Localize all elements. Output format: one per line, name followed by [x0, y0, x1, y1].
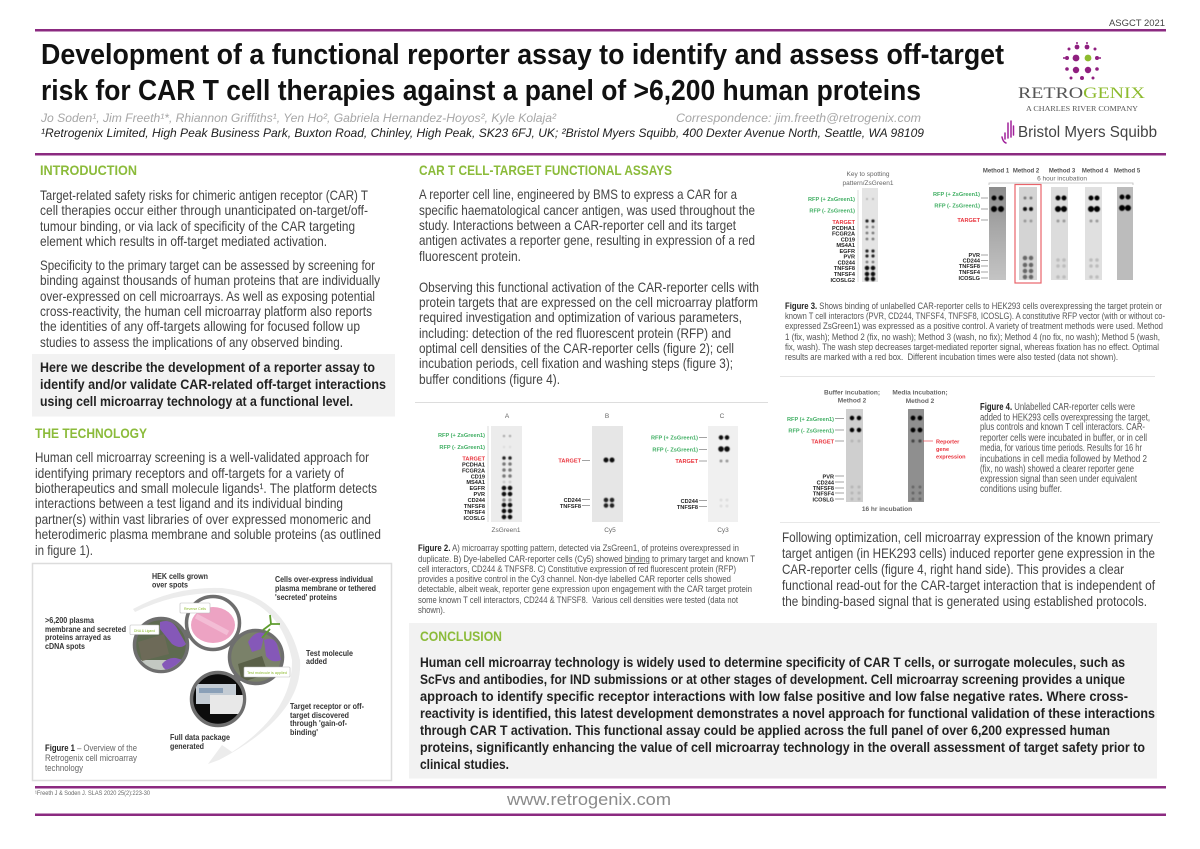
figure 3 caption: results are marked with a red box. Different incubation times were also tested (data not shown). — [785, 352, 1118, 363]
key to spotting pattern: MS4A1 — [836, 243, 855, 249]
annotation: data package: generated — [170, 742, 204, 751]
website: www.retrogenix.com — [506, 790, 671, 809]
labels: RFP (+ ZsGreen1) — [438, 433, 485, 439]
labels: RFP (+ ZsGreen1) — [651, 436, 698, 442]
annotation: target receptor: through 'gain-of- — [290, 719, 347, 728]
footer rule bottom — [35, 814, 1166, 816]
annotation: test molecule: added — [306, 657, 327, 666]
buffer strip labels: RFP (- ZsGreen1) — [788, 428, 834, 434]
annotation: HEK cells: over spots — [152, 580, 188, 590]
panel A strip: TNFSF8 — [464, 504, 485, 510]
figure 2 — [418, 413, 755, 616]
heading: THE TECHNOLOGY — [35, 425, 148, 441]
closing paragraph: CAR-reporter cells (figure 4, right hand side). This provides a clear — [782, 562, 1124, 577]
buffer strip labels: TARGET — [811, 440, 835, 446]
spots — [606, 458, 612, 462]
assay paragraph 2 — [419, 280, 759, 387]
incubation bracket: 6 hour incubation — [1037, 176, 1087, 182]
icon: antibody — [262, 615, 280, 638]
header rule bottom — [35, 153, 1166, 156]
panel: conclusion — [409, 623, 1157, 778]
figure 2 caption — [418, 543, 755, 616]
buffer strip labels: ICOSLG — [813, 498, 834, 504]
panel C strip: CD244 — [681, 499, 699, 505]
technology paragraph: interactions between a test ligand and its individual binding — [35, 496, 343, 511]
correspondence: Correspondence: jim.freeth@retrogenix.com — [676, 111, 921, 125]
labels: TARGET — [558, 458, 582, 464]
conclusion text: approach to identify specific receptor interactions with low false positive and low false negative rates. Where cross- — [420, 689, 1128, 704]
buffer strip labels — [787, 417, 844, 504]
figure 4 caption: plus controls and known T cell interactors. CAR- — [980, 422, 1145, 433]
assay paragraph 1: specific haematological cancer antigen, was used throughout the — [419, 203, 755, 218]
annotation: test molecule — [306, 649, 353, 666]
panel A strip: EGFR — [469, 486, 485, 492]
key to spotting pattern: FCGR2A — [832, 232, 855, 238]
intro paragraph 2: Specificity to the primary target can be assessed by screening for — [40, 258, 375, 273]
spots — [721, 435, 727, 440]
intro paragraph 2 — [40, 258, 380, 350]
key to spotting pattern: CD244 — [838, 260, 856, 266]
annotation: HEK cells: HEK cells grown — [152, 572, 208, 581]
annotation: over-express: 'secreted' proteins — [275, 593, 337, 602]
media strip: Media incubation; — [892, 390, 948, 396]
callout: aim of the study: identify and/or validate CAR-related off-target interactions — [40, 377, 386, 392]
footer rule top — [35, 786, 1166, 788]
method headers: Method 1 — [983, 168, 1010, 174]
conclusion text — [420, 655, 1155, 772]
annotation: data package: Full data package — [170, 733, 230, 742]
logo: Bristol Myers Squibb — [1002, 121, 1157, 143]
arrow: process arc — [133, 588, 300, 764]
label: reverse cells: Reverse Cells — [184, 606, 206, 611]
panel A strip — [438, 413, 522, 534]
circle: arrayed spots — [134, 618, 188, 672]
spots — [504, 435, 510, 437]
figure 4 caption: added to HEK293 cells overexpressing the target, — [980, 412, 1150, 424]
circle: data package — [192, 672, 244, 726]
affiliations: ¹Retrogenix Limited, High Peak Business Park, Buxton Road, Chinley, High Peak, SK23 6FJ, UK; ²Bristol Myers Squibb, 400 Dexter Avenue North, Seattle, WA 98109 — [41, 126, 924, 140]
figure 4 caption — [980, 402, 1150, 495]
panel A strip: FCGR2A — [462, 468, 485, 474]
reporter annotation — [923, 440, 966, 460]
key to spotting pattern: CD19 — [841, 238, 855, 244]
header rule top — [35, 29, 1166, 32]
technology paragraph: heterodimeric plasma membrane and soluble proteins (as outlined — [35, 527, 381, 542]
reporter annotation: Reporter — [936, 440, 960, 446]
heading: INTRODUCTION — [40, 162, 137, 178]
technology paragraph: in figure 1). — [35, 543, 93, 558]
method labels: TNFSF4 — [959, 270, 981, 276]
buffer strip: Buffer incubation; — [824, 390, 880, 396]
intro paragraph 2: the identities of any off-targets allowing for focused follow up — [40, 319, 360, 334]
incubation note: 16 hr incubation — [862, 506, 912, 513]
figure 3 — [785, 168, 1165, 363]
annotation: target receptor — [290, 702, 364, 737]
intro paragraph 2: binding against thousands of human proteins that are individually — [40, 273, 380, 288]
closing paragraph: the binding-based signal that is generated using established protocols. — [782, 594, 1147, 609]
annotation: over-express: plasma membrane or tethered — [275, 584, 376, 593]
annotation: target receptor: target discovered — [290, 711, 349, 720]
label: DNA and ligand — [130, 625, 159, 634]
panel A strip: ICOSLG — [464, 516, 485, 522]
panel A strip: MS4A1 — [466, 480, 485, 486]
reporter annotation: gene — [936, 447, 949, 453]
figure 2 caption: some known T cell interactors, CD244 & TNFSF8. Various cell densities were tested (data not — [418, 595, 738, 606]
annotation: plasma membrane spots: >6,200 plasma — [45, 616, 94, 625]
wordmark: RETRO GENIX — [1018, 85, 1145, 102]
figure 2 caption: detectable, albeit weak, reporter gene expression upon engagement with the CAR target protein — [418, 584, 752, 595]
assay paragraph 1: fluorescent protein. — [419, 249, 521, 264]
panel B strip: CD244 — [564, 498, 582, 504]
assay paragraph 1 — [419, 187, 755, 264]
conclusion text: clinical studies. — [420, 757, 509, 772]
intro paragraph 1: tumour binding, or via lack of specificity of the CAR targeting — [40, 219, 355, 234]
figure 4 caption: reporter cells were incubated in buffer, or in cell — [980, 433, 1147, 444]
panel: functional assays — [419, 162, 759, 387]
intro paragraph 1: element which results in off-target mediated activation. — [40, 234, 327, 249]
figure 4 caption: media, for various time periods. Results for 16 hr — [980, 443, 1142, 454]
figure 2 caption: shown). — [418, 605, 445, 616]
figure 4 caption: conditions using buffer. — [980, 484, 1062, 495]
panel B strip — [558, 413, 623, 534]
panel A strip: PCDHA1 — [462, 462, 485, 468]
title: risk for CAR T cell therapies against a panel of >6,200 human proteins — [41, 75, 921, 107]
method strips — [989, 187, 1133, 280]
method labels: CD244 — [963, 258, 981, 264]
assay paragraph 1: A reporter cell line, engineered by BMS to express a CAR for a — [419, 187, 737, 202]
key to spotting pattern: PVR — [843, 254, 855, 260]
conclusion text: through CAR T activation. This functional assay could be applied across the full panel of over 6,200 expressed human — [420, 723, 1110, 738]
assay paragraph 2: required investigation and optimization of various parameters, — [419, 310, 742, 325]
figure 1 caption — [45, 743, 137, 774]
panel B strip: Cy5 — [604, 527, 616, 534]
figure 4 caption: incubations in cell media followed by Method 2 — [980, 454, 1147, 465]
intro paragraph 1: Target-related safety risks for chimeric antigen receptor (CAR) T — [40, 188, 368, 203]
technology paragraph: identifying primary receptors and off-targets for a variety of — [35, 466, 344, 481]
buffer strip labels: PVR — [822, 474, 834, 480]
annotation: plasma membrane spots: cDNA spots — [45, 642, 85, 651]
figure 4 caption: Figure 4. Unlabelled CAR-reporter cells were — [980, 402, 1135, 413]
panel C strip: Cy3 — [717, 527, 729, 534]
key to spotting pattern: ICOSLG2 — [830, 278, 855, 284]
method headers: Method 4 — [1082, 168, 1109, 174]
method headers: Method 5 — [1114, 168, 1141, 174]
intro paragraph 2: over-expressed on cell microarrays. As well as exposing potential — [40, 289, 375, 304]
buffer strip labels: RFP (+ ZsGreen1) — [787, 417, 834, 423]
panel C strip: TNFSF8 — [677, 505, 698, 511]
buffer strip: Method 2 — [838, 398, 867, 404]
buffer strip — [824, 390, 880, 502]
panel A strip: A — [505, 413, 510, 420]
annotation: plasma membrane spots — [45, 616, 126, 651]
figure 4 caption: expression signal than seen under equivalent — [980, 474, 1137, 485]
intro paragraph 2: studies to assess the implications of any observed binding. — [40, 335, 343, 350]
key to spotting pattern: EGFR — [839, 249, 855, 255]
panel C strip: TARGET — [675, 459, 699, 465]
logo: Retrogenix — [1018, 42, 1145, 113]
annotation: test molecule: Test molecule — [306, 649, 353, 658]
key to spotting pattern: TNFSF4 — [834, 272, 856, 278]
media strip — [892, 390, 948, 502]
panel A strip: ZsGreen1 — [492, 527, 521, 534]
technology paragraph: Human cell microarray screening is a well-validated approach for — [35, 450, 369, 465]
panel: figure 1 — [32, 564, 392, 780]
panel A strip: PVR — [473, 492, 485, 498]
buffer strip labels: CD244 — [817, 480, 835, 486]
conclusion text: proteins, significantly enhancing the value of cell microarray technology in the overall assessment of target safety prior to — [420, 740, 1145, 755]
key to spotting pattern: TARGET — [832, 220, 856, 226]
assay paragraph 1: antigen activates a reporter gene, resulting in expression of a red — [419, 233, 755, 248]
panel B strip: B — [605, 413, 609, 420]
method labels: RFP (- ZsGreen1) — [934, 204, 980, 210]
panel: introduction — [40, 162, 380, 350]
panel C strip — [651, 413, 738, 534]
media strip: Method 2 — [906, 398, 935, 405]
annotation: over-express — [275, 575, 376, 602]
method labels: TARGET — [957, 218, 981, 224]
method labels: PVR — [968, 253, 980, 259]
circle: culture dish — [186, 596, 240, 650]
wordmark: Bristol Myers Squibb — [1018, 124, 1157, 141]
intro paragraph 2: cross-reactivity, the human cell microarray platform also reports — [40, 304, 372, 319]
panel A strip: CD244 — [468, 498, 486, 504]
label: test molecule applied: Test molecule is applied — [247, 670, 287, 675]
panel: the technology — [35, 425, 381, 558]
key to spotting pattern: Key to spotting — [846, 171, 890, 178]
method labels: RFP (+ ZsGreen1) — [933, 192, 980, 198]
figure 4 caption: (fix, no wash) showed a clearer reporter gene — [980, 464, 1134, 475]
assay paragraph 2: incubation periods, cell fixation and washing steps (figure 3); — [419, 356, 733, 371]
annotation: HEK cells — [152, 572, 208, 590]
intro paragraph 1: cell therapies occur either through unanticipated on-target/off- — [40, 203, 368, 218]
key to spotting pattern: TNFSF8 — [834, 266, 855, 272]
key to spotting pattern: RFP (- ZsGreen1) — [809, 208, 855, 214]
assay paragraph 2: buffer conditions (figure 4). — [419, 372, 560, 387]
diagram: process circles — [130, 596, 290, 726]
authors: Jo Soden¹, Jim Freeth¹*, Rhiannon Griffiths¹, Yen Ho², Gabriela Hernandez-Hoyos², Kyle Kolaja² — [40, 111, 557, 125]
annotation: data package — [170, 733, 230, 751]
label: test molecule applied — [244, 667, 290, 677]
assay paragraph 2: optimal cell densities of the CAR-reporter cells (figure 2); cell — [419, 341, 734, 356]
icon: BMS — [1002, 121, 1014, 143]
callout: aim of the study: using cell microarray technology at a functional level. — [40, 394, 353, 409]
buffer strip labels: TNFSF4 — [813, 492, 835, 498]
intro paragraph 1 — [40, 188, 368, 249]
figure 2 caption: provides a positive control in the Cy3 channel. Non-dye labelled CAR reporter cells showed — [418, 574, 731, 585]
panel C strip: C — [720, 413, 725, 420]
figure 1 caption: Figure 1 – Overview of the — [45, 743, 137, 754]
conclusion text: Human cell microarray technology is widely used to determine specificity of CAR T cells, or surrogate molecules, such as — [420, 655, 1125, 670]
closing paragraph — [782, 530, 1155, 609]
heading: CAR T CELL-TARGET FUNCTIONAL ASSAYS — [419, 162, 672, 178]
optimal result red box — [1015, 184, 1041, 283]
icon: Retrogenix dot sphere — [1063, 42, 1101, 80]
method labels: TNFSF8 — [959, 264, 980, 270]
assay paragraph 2: Observing this functional activation of the CAR-reporter cells with — [419, 280, 759, 295]
panel C strip: RFP (- ZsGreen1) — [652, 448, 698, 454]
figure 4 — [787, 390, 1150, 513]
method labels — [933, 192, 988, 282]
assay paragraph 1: study. Interactions between a CAR-reporter cell and its target — [419, 218, 736, 233]
title: Development of a functional reporter assay to identify and assess off-target — [41, 39, 1004, 71]
figure 2 caption: duplicate. B) Dye-labelled CAR-reporter cells (Cy5) showed binding to primary target and known T — [418, 554, 755, 565]
annotation: target receptor: Target receptor or off- — [290, 702, 364, 711]
assay paragraph 2: protein targets that are expressed on the cell microarray platform — [419, 295, 758, 310]
method labels: ICOSLG — [959, 276, 980, 282]
title — [41, 39, 1004, 107]
annotation: plasma membrane spots: membrane and secreted — [45, 625, 126, 634]
key to spotting pattern: PCDHA1 — [832, 226, 855, 232]
panel A strip: RFP (- ZsGreen1) — [439, 445, 485, 451]
tagline: A CHARLES RIVER COMPANY — [1026, 105, 1138, 113]
callout: aim of the study: Here we describe the development of a reporter assay to — [40, 360, 375, 375]
reporter annotation: expression — [936, 454, 966, 460]
technology paragraph — [35, 450, 381, 558]
method headers: Method 2 — [1013, 168, 1040, 174]
method headers — [983, 168, 1141, 174]
key to spotting pattern: pattern/ZsGreen1 — [843, 180, 894, 187]
buffer strip labels: TNFSF8 — [813, 486, 834, 492]
reference footnote: ¹Freeth J & Soden J. SLAS 2020 25(2):223-30 — [35, 791, 151, 797]
technology paragraph: partner(s) within vast libraries of over expressed monomeric and — [35, 512, 371, 527]
panel A strip: CD19 — [471, 474, 485, 480]
key to spotting pattern — [808, 171, 894, 284]
figure 3 caption — [785, 301, 1165, 363]
figure 2 caption: cell interactors, CD244 & TNFSF8. C) Constitutive expression of red fluorescent protein (RFP) — [418, 564, 736, 575]
key to spotting pattern: RFP (+ ZsGreen1) — [808, 197, 855, 203]
figure 1 caption: Retrogenix cell microarray — [45, 753, 137, 764]
label: DNA and ligand: DNA & Ligand — [134, 628, 155, 633]
assay paragraph 2: including: detection of the red fluorescent protein (RFP) and — [419, 326, 731, 341]
conference label: ASGCT 2021 — [1109, 18, 1165, 28]
annotation: over-express: Cells over-express individual — [275, 575, 373, 584]
figure 1 caption: technology — [45, 763, 83, 774]
annotation: target receptor: binding' — [290, 728, 318, 737]
panel B strip: TNFSF8 — [560, 504, 581, 510]
circle: test molecule — [230, 615, 282, 684]
heading: CONCLUSION — [420, 628, 502, 644]
panel A strip: TNFSF4 — [464, 510, 486, 516]
method headers: Method 3 — [1049, 168, 1076, 174]
technology paragraph: biotherapeutics and small molecule ligands¹. The platform detects — [35, 481, 377, 496]
label: reverse cells — [180, 603, 210, 613]
callout: aim of the study — [32, 354, 395, 416]
annotation: plasma membrane spots: proteins arrayed as — [45, 633, 111, 642]
panel A strip: TARGET — [462, 456, 486, 462]
figure 2 caption: Figure 2. A) microarray spotting pattern, detected via ZsGreen1, of proteins overexpressed in — [418, 543, 739, 554]
